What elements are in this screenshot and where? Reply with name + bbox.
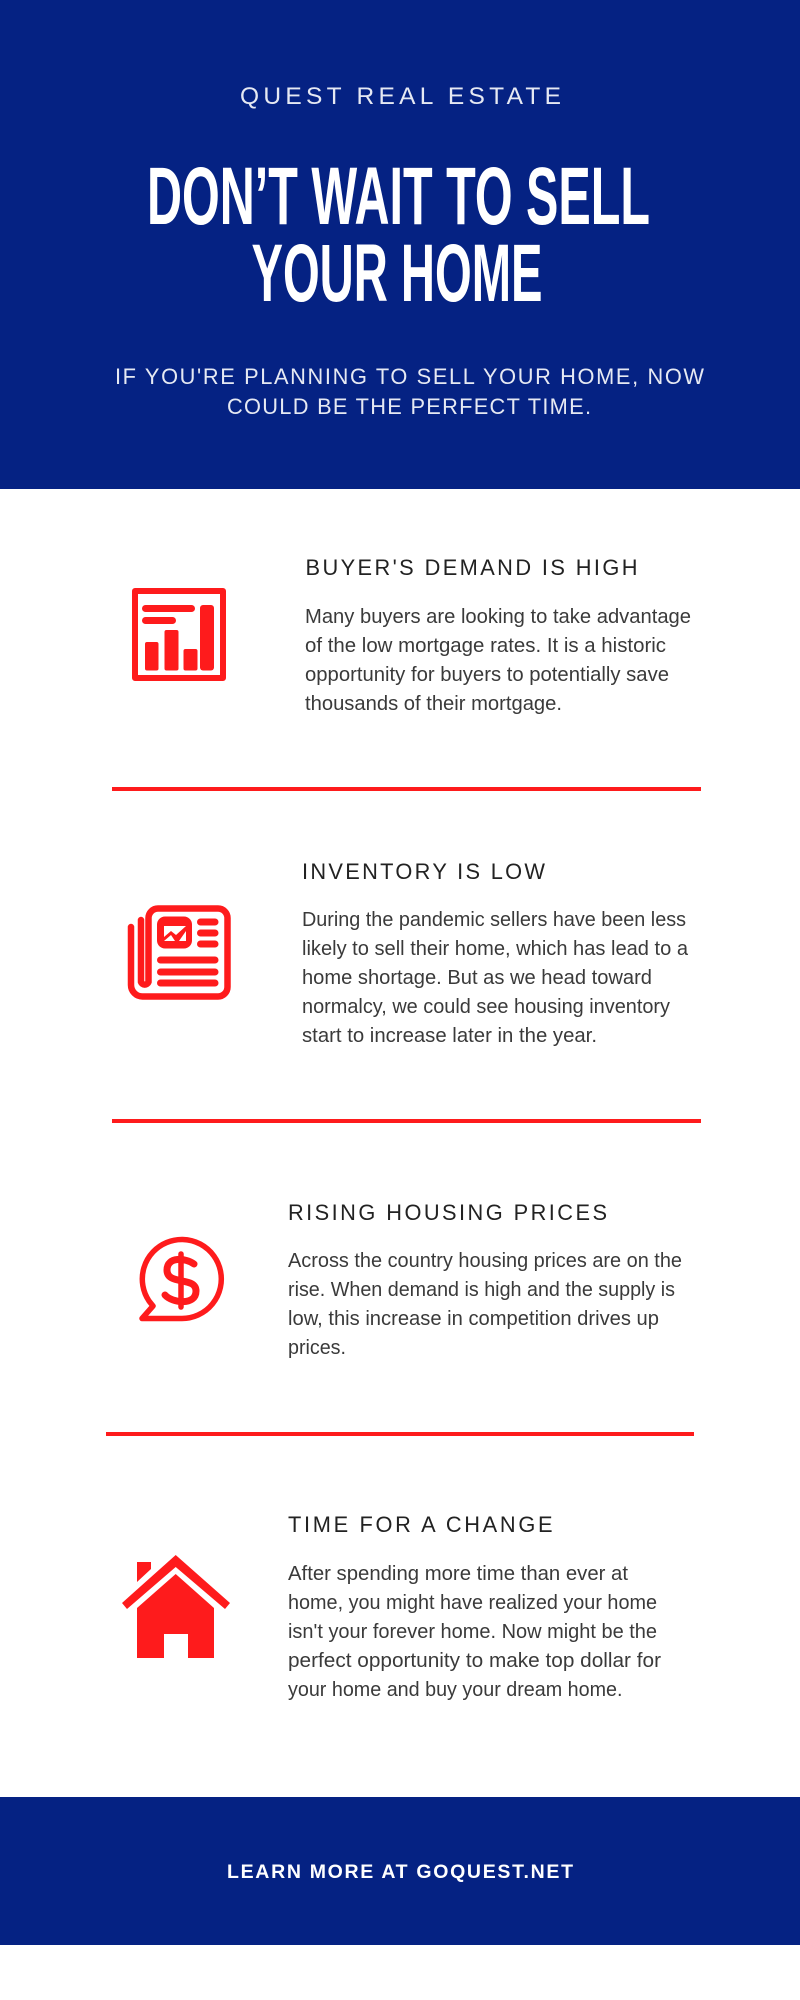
brand name: QUEST REAL ESTATE xyxy=(240,83,561,110)
body text: home, you might have realized your home xyxy=(288,1592,657,1614)
icon: bar chart report xyxy=(135,591,223,678)
heading: INVENTORY IS LOW xyxy=(302,859,545,884)
subtitle xyxy=(115,364,704,419)
body text: During the pandemic sellers have been less xyxy=(302,909,686,931)
body text xyxy=(288,1563,661,1701)
body text: rise. When demand is high and the supply is xyxy=(288,1279,675,1301)
panel: rising prices xyxy=(142,1200,682,1359)
panel: buyer's demand xyxy=(135,555,691,715)
heading: TIME FOR A CHANGE xyxy=(288,1512,552,1537)
body text xyxy=(305,606,691,715)
body text: perfect opportunity to make top dollar for xyxy=(288,1650,661,1672)
panel: footer xyxy=(0,1797,800,1945)
icon: house xyxy=(122,1555,230,1658)
icon: dollar speech bubble xyxy=(142,1240,221,1318)
body text: start to increase later in the year. xyxy=(302,1025,597,1047)
heading: BUYER'S DEMAND IS HIGH xyxy=(306,555,638,580)
body text: of the low mortgage rates. It is a historic xyxy=(305,635,666,657)
subtitle: IF YOU'RE PLANNING TO SELL YOUR HOME, NOW xyxy=(115,364,704,389)
heading: RISING HOUSING PRICES xyxy=(288,1200,607,1225)
body text: low, this increase in competition drives up xyxy=(288,1308,659,1330)
body text: After spending more time than ever at xyxy=(288,1563,628,1585)
icon: newspaper xyxy=(131,908,228,996)
body text xyxy=(288,1250,682,1359)
body text: opportunity for buyers to potentially save xyxy=(305,664,669,686)
panel: inventory xyxy=(131,859,689,1047)
body text: normalcy, we could see housing inventory xyxy=(302,996,671,1018)
body text: Many buyers are looking to take advantage xyxy=(305,606,691,628)
body text: likely to sell their home, which has lead to a xyxy=(302,938,689,960)
body text: prices. xyxy=(288,1337,346,1359)
body text: isn't your forever home. Now might be the xyxy=(288,1621,657,1643)
panel: time for a change xyxy=(122,1512,661,1701)
body text: thousands of their mortgage. xyxy=(305,693,562,715)
call to action: LEARN MORE AT GOQUEST.NET xyxy=(227,1861,573,1883)
body text: home shortage. But as we head toward xyxy=(302,967,652,989)
title: YOUR HOME xyxy=(252,228,542,319)
body text xyxy=(302,909,689,1047)
body text: your home and buy your dream home. xyxy=(288,1679,622,1701)
body text: Across the country housing prices are on the xyxy=(288,1250,682,1272)
title xyxy=(147,151,650,319)
panel: header xyxy=(0,0,800,489)
subtitle: COULD BE THE PERFECT TIME. xyxy=(227,394,591,419)
